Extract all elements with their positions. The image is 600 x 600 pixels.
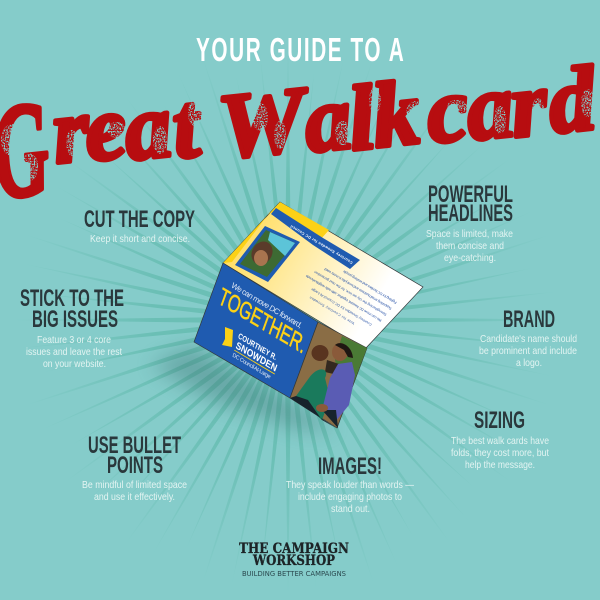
- card top panel: [223, 202, 423, 349]
- section: brand: [479, 306, 577, 369]
- section: sizing: SIZING: [474, 407, 525, 434]
- card top panel: Courtney Snowden for DC Council At-Large: [310, 287, 373, 327]
- section: images: They speak louder than words —: [286, 479, 414, 491]
- section: sizing: folds, they cost more, but: [451, 447, 549, 459]
- card tagline: We can move DC forward,: [230, 281, 303, 330]
- card top panel: We can move DC forward, together, with safe neighborhoods: [305, 274, 383, 323]
- card front blue panel: DC Council At-Large: [231, 353, 271, 381]
- section: stick to the big issues: Feature 3 or 4 core: [37, 334, 111, 346]
- section: use bullet points: and use it effectively.: [94, 491, 175, 503]
- title: great walkcard script: W: [214, 68, 316, 178]
- section: powerful headlines: POWERFUL: [428, 181, 513, 208]
- walk card: [194, 202, 423, 428]
- section: stick to the big issues: [20, 285, 124, 370]
- title: great walkcard script: [0, 46, 600, 227]
- section: sizing: help the message.: [465, 459, 535, 471]
- section: images: [286, 453, 414, 515]
- section: use bullet points: [82, 432, 187, 503]
- card front blue panel: [194, 263, 318, 398]
- card headline: TOGETHER.: [215, 283, 310, 359]
- section: images: include engaging photos to: [298, 491, 402, 503]
- section: cut the copy: CUT THE COPY: [84, 206, 195, 233]
- logo: the campaign workshop: THE CAMPAIGN: [239, 541, 349, 557]
- section: brand: BRAND: [503, 306, 555, 333]
- section: stick to the big issues: issues and leave the rest: [26, 346, 122, 358]
- section: use bullet points: Be mindful of limited space: [82, 479, 187, 491]
- section: images: stand out.: [331, 503, 370, 515]
- section: brand: be prominent and include: [479, 345, 577, 357]
- section: images: IMAGES!: [318, 453, 382, 480]
- distressed speckle: [1, 87, 595, 181]
- section: stick to the big issues: BIG ISSUES: [32, 306, 118, 333]
- logo: the campaign workshop: [239, 541, 349, 578]
- card top panel: Supporting small business and local jobs in every ward: [324, 267, 393, 311]
- card top panel: Vote for Courtney Snowden: [309, 295, 356, 326]
- section: sizing: The best walk cards have: [451, 435, 549, 447]
- section: powerful headlines: HEADLINES: [428, 200, 513, 227]
- logo: the campaign workshop: BUILDING BETTER CAMPAIGNS: [242, 570, 346, 578]
- card front blue panel: SNOWDEN: [234, 340, 278, 375]
- section: use bullet points: USE BULLET: [88, 432, 181, 459]
- section: brand: Candidate's name should: [480, 333, 577, 345]
- section: use bullet points: POINTS: [107, 452, 163, 479]
- logo: the campaign workshop: WORKSHOP: [252, 553, 335, 569]
- title: great walkcard script: alkcard: [299, 46, 600, 172]
- section: stick to the big issues: STICK TO THE: [20, 285, 124, 312]
- section: powerful headlines: Space is limited, make: [426, 228, 513, 240]
- card front photo: [290, 322, 367, 428]
- title: great walkcard script: reat: [47, 74, 206, 183]
- section: sizing: [451, 407, 549, 471]
- card candidate name: COURTNEY R.: [237, 331, 278, 362]
- card shadow: [150, 345, 337, 430]
- section: powerful headlines: eye-catching.: [444, 252, 496, 264]
- card top panel: Strengthening the city we love, for the next generation: [313, 270, 388, 317]
- section: brand: a logo.: [516, 357, 542, 369]
- section: powerful headlines: them concise and: [436, 240, 504, 252]
- section: cut the copy: [84, 206, 195, 245]
- section: powerful headlines: [426, 181, 513, 264]
- section: stick to the big issues: on your website.: [43, 358, 106, 370]
- section: cut the copy: Keep it short and concise.: [90, 233, 190, 245]
- title: your guide to a: YOUR GUIDE TO A: [196, 31, 404, 68]
- card top panel: Fighting for DC families and working people: [342, 269, 398, 305]
- card top panel: Courtney Snowden for DC Council: [290, 224, 354, 265]
- card logo shape: [222, 327, 233, 347]
